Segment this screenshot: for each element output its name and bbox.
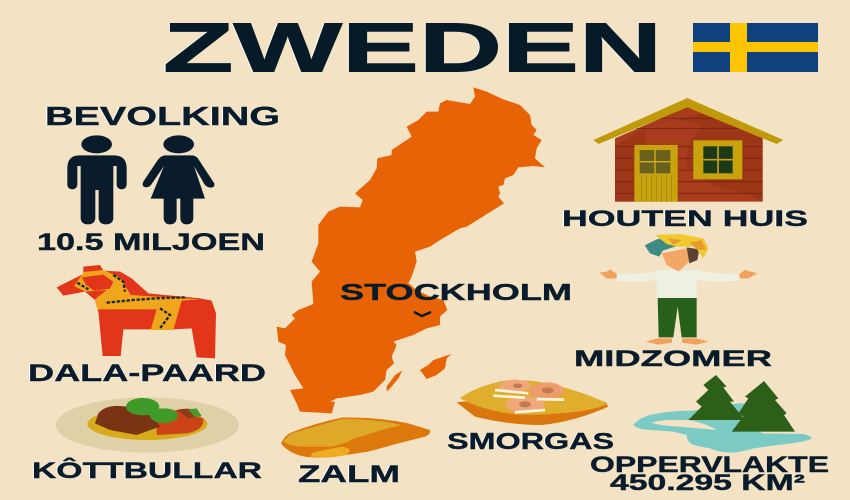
icon: woman	[143, 135, 214, 224]
island: Gotland	[420, 354, 452, 379]
panel: midsummer	[574, 234, 772, 371]
icon: open sandwich	[457, 380, 608, 425]
panel: salmon	[281, 418, 430, 488]
door	[634, 145, 678, 202]
panel: area	[590, 375, 829, 495]
area value: 450.295 KM²	[610, 470, 805, 495]
icon: pine trees	[688, 375, 795, 432]
icon: man	[67, 135, 127, 224]
capital label	[340, 279, 572, 316]
label: zalm: ZALM	[298, 461, 400, 488]
label: houten huis: HOUTEN HUIS	[562, 206, 808, 231]
icon: person with flower crown	[599, 234, 757, 345]
map of Sweden	[277, 87, 545, 413]
label: smorgas: SMORGAS	[447, 428, 614, 454]
label: oppervlakte: OPPERVLAKTE	[590, 452, 829, 477]
panel: meatballs	[32, 397, 262, 483]
island: Oland	[387, 371, 402, 392]
window	[693, 140, 742, 179]
heading: bevolking: BEVOLKING	[45, 103, 280, 131]
title: ZWEDEN	[163, 8, 662, 86]
label: midzomer: MIDZOMER	[574, 346, 772, 371]
icon: plate of meatballs	[56, 397, 239, 453]
icon: house	[593, 98, 783, 202]
icon: dala horse	[57, 265, 216, 358]
icon: bread	[281, 418, 430, 457]
icon: Swedish flag	[693, 23, 818, 72]
panel: sandwich	[447, 380, 614, 454]
marker: Stockholm	[414, 312, 431, 316]
panel: dala horse	[28, 265, 266, 387]
label: kottbullar: KÔTTBULLAR	[32, 458, 262, 483]
capital label: STOCKHOLM	[340, 279, 572, 305]
panel: population	[37, 103, 280, 256]
population value: 10.5 MILJOEN	[37, 229, 265, 256]
panel: wooden house	[562, 98, 808, 231]
icon: lake	[633, 403, 812, 453]
label: dala-paard: DALA-PAARD	[28, 360, 266, 387]
